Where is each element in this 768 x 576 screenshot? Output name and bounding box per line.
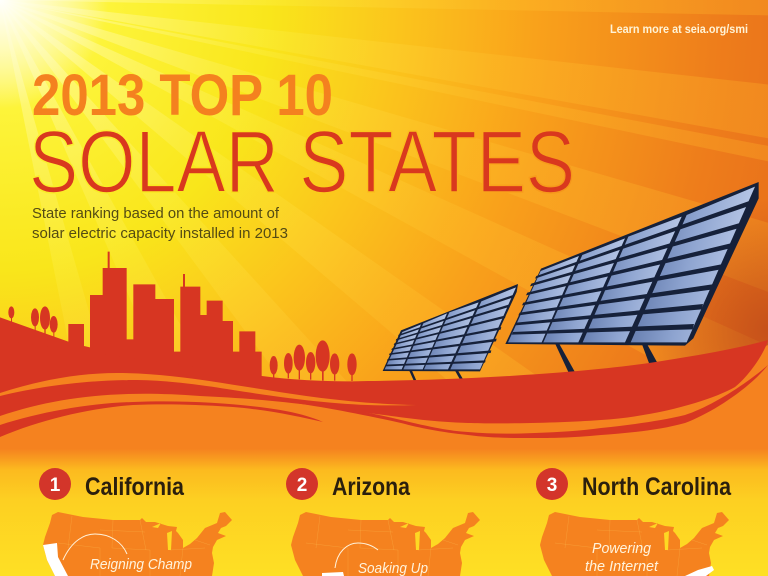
small solar panel (383, 284, 518, 371)
number badge 3 (536, 468, 568, 500)
number badge 1: 1 (50, 475, 61, 496)
second red band (0, 401, 323, 437)
number badge 3: 3 (547, 475, 557, 496)
title: solar states: SOLAR STATES (29, 112, 575, 211)
small panel legs (409, 370, 464, 382)
background: shaded corner (600, 200, 768, 400)
title: 2013 top 10: 2013 TOP 10 (32, 63, 333, 128)
ranking 1: California (39, 468, 232, 576)
illustration: red ground swoosh (0, 340, 768, 438)
subtitle: State ranking based on the amount of (32, 206, 280, 222)
skyline buildings (0, 252, 262, 387)
large panel legs (555, 343, 658, 373)
number badge 2: 2 (297, 475, 307, 496)
state name North Carolina: North Carolina (582, 473, 732, 501)
state name Arizona: Arizona (332, 473, 411, 501)
background: lower orange-to-yellow band (0, 345, 768, 576)
subtitle: solar electric capacity installed in 2013 (32, 226, 288, 242)
number badge 2 (286, 468, 318, 500)
map: North Carolina highlighted (540, 512, 729, 576)
map: North Carolina highlighted: the Internet (585, 558, 659, 575)
trees (8, 306, 357, 381)
ranking 2: Arizona (286, 468, 480, 576)
map: North Carolina highlighted: Powering (592, 540, 652, 557)
large solar panel (505, 182, 759, 346)
background: sun glow (0, 0, 110, 110)
subtitle (32, 206, 288, 242)
thin lower swoosh (267, 365, 768, 438)
number badge 1 (39, 468, 71, 500)
map: California highlighted (43, 512, 232, 576)
illustration: solar panels (383, 182, 759, 382)
ranking 3: North Carolina (536, 468, 732, 576)
map: California highlighted: Reigning Champ (90, 556, 192, 573)
map: Arizona highlighted (291, 512, 480, 576)
illustration: city skyline with trees (0, 252, 357, 387)
main red wave (0, 340, 768, 423)
state name California: California (85, 473, 185, 501)
link: learn more: Learn more at seia.org/smi (610, 22, 748, 36)
orange stripe on wave (0, 373, 416, 405)
